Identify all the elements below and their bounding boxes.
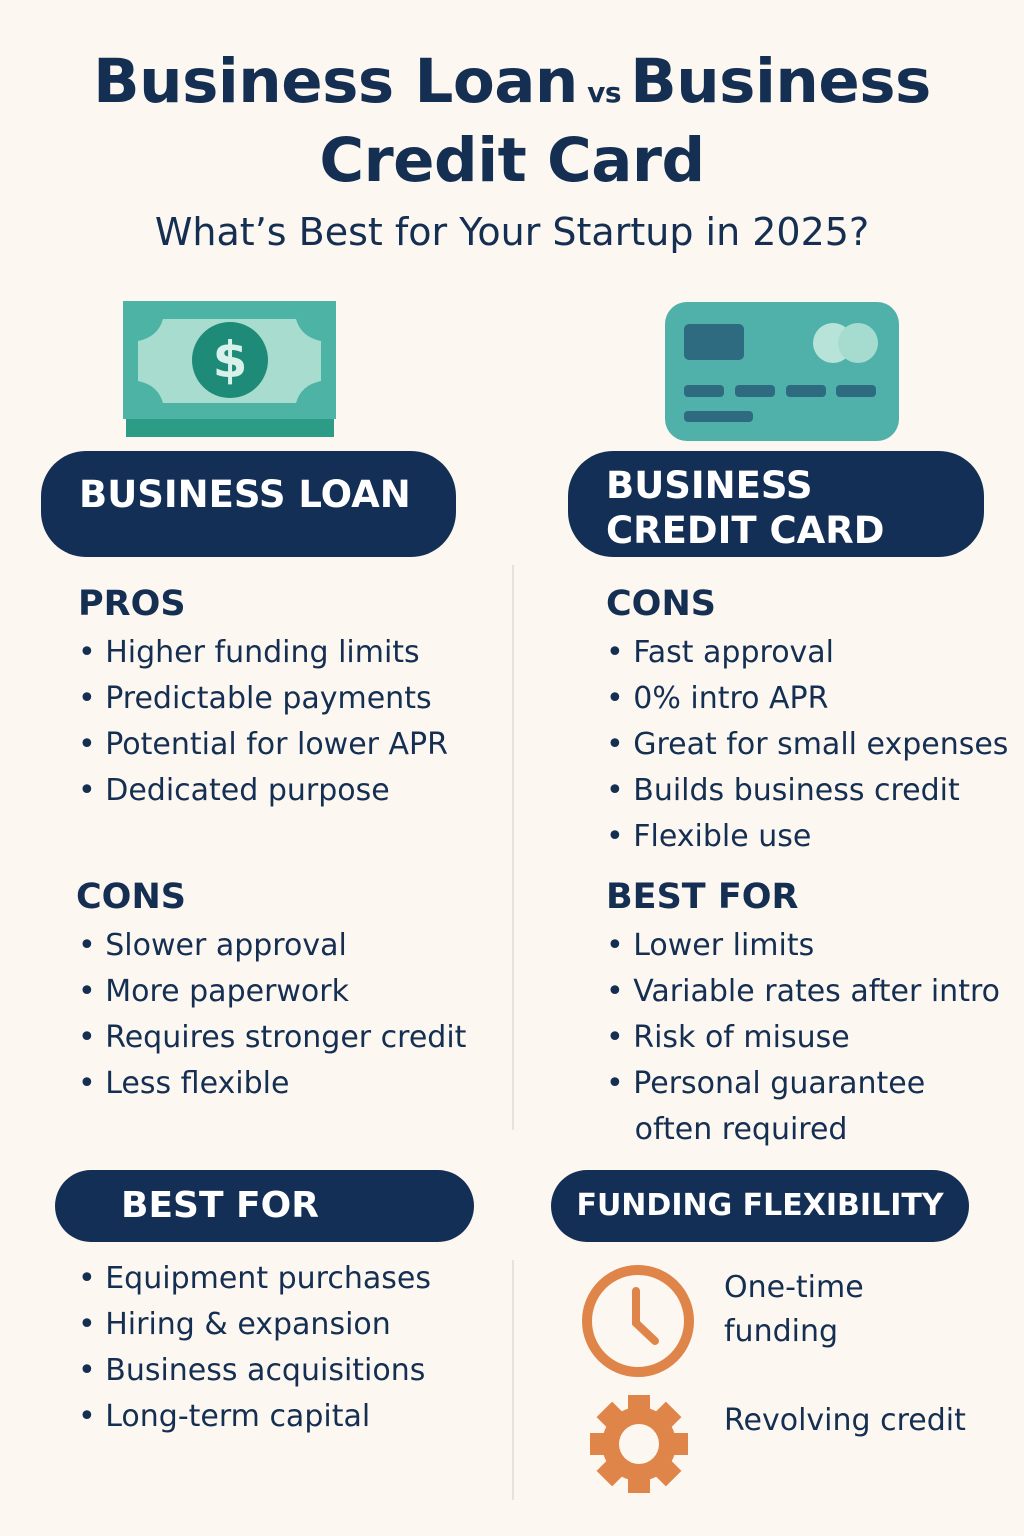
left best for list: • Business acquisitions [78,1353,425,1388]
left pros: • Dedicated purpose [78,773,390,808]
text: revolving credit: Revolving credit [724,1403,966,1438]
left cons: CONS [76,877,186,917]
right cons [606,584,1008,854]
left pros: • Potential for lower APR [78,727,448,762]
left cons: • Less flexible [78,1066,289,1101]
text: one-time funding: One-time [724,1270,864,1305]
left pros: • Predictable payments [78,681,432,716]
pill: business loan: BUSINESS LOAN [79,473,411,516]
left pros [78,584,448,808]
right cons: CONS [606,584,716,624]
left best for list [78,1261,431,1434]
pill: business credit card: CREDIT CARD [606,509,885,552]
left best for list: • Long-term capital [78,1399,370,1434]
right cons: • Builds business credit [606,773,960,808]
pill: business credit card: BUSINESS [606,464,813,507]
icon: credit card [665,302,899,441]
text: one-time funding: funding [724,1314,838,1349]
left cons: • Requires stronger credit [78,1020,466,1055]
left best for list: • Equipment purchases [78,1261,431,1296]
pill: best for: BEST FOR [121,1185,319,1226]
text: one-time funding [724,1270,864,1349]
pill: business loan [41,451,456,557]
right best for: • Personal guarantee [606,1066,925,1101]
title: Credit Card [319,125,705,196]
pill: funding flexibility [551,1170,969,1242]
right cons: • 0% intro APR [606,681,828,716]
pill: business credit card [568,451,984,557]
right best for [606,877,1000,1147]
right best for: BEST FOR [606,877,798,917]
icon: gear [590,1395,688,1493]
right best for: • Risk of misuse [606,1020,850,1055]
right best for: • Lower limits [606,928,814,963]
left cons: • More paperwork [78,974,349,1009]
subtitle: What’s Best for Your Startup in 2025? [155,210,869,254]
pill: best for [55,1170,474,1242]
left cons [76,877,466,1101]
right cons: • Fast approval [606,635,834,670]
right best for: • Variable rates after intro [606,974,1000,1009]
right best for: often required [635,1112,847,1147]
left pros: • Higher funding limits [78,635,420,670]
icon: clock [582,1265,694,1377]
pill: funding flexibility: FUNDING FLEXIBILITY [576,1188,944,1223]
title: Business Loan vs Business [93,46,931,117]
icon: money bill: $ [213,331,247,389]
left best for list: • Hiring & expansion [78,1307,391,1342]
icon: money bill [123,301,336,437]
left pros: PROS [78,584,186,624]
right cons: • Flexible use [606,819,811,854]
right cons: • Great for small expenses [606,727,1008,762]
left cons: • Slower approval [78,928,347,963]
title [93,46,931,196]
